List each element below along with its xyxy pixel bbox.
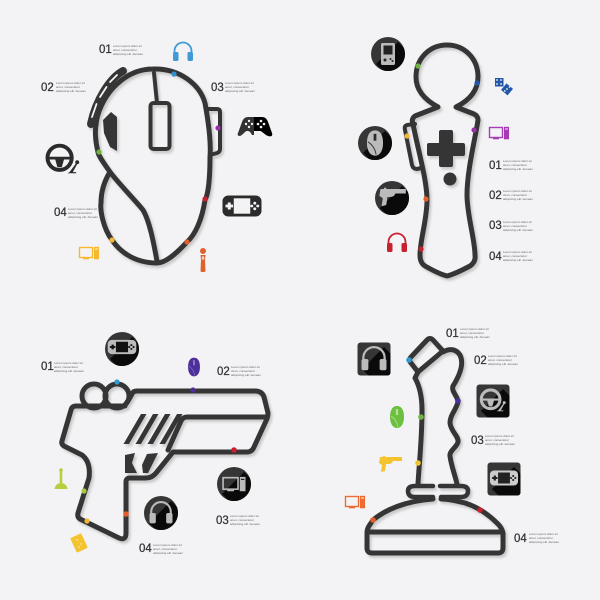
label 01	[446, 327, 490, 340]
colored dots	[96, 71, 221, 245]
icon: blue dice	[495, 78, 513, 95]
label 04: adipiscing elit. Aenean	[503, 258, 533, 262]
label 03: amet, consectetur	[503, 224, 527, 228]
label 04: adipiscing elit. Aenean	[153, 551, 183, 555]
label 03: adipiscing elit. Aenean	[230, 522, 260, 526]
label 02: 02	[217, 366, 230, 378]
label 03: 03	[216, 515, 229, 527]
label 02: adipiscing elit. Aenean	[488, 362, 518, 366]
label 02: amet, consectetur	[488, 358, 512, 362]
label 04: adipiscing elit. Aenean	[529, 540, 559, 544]
label 02: adipiscing elit. Aenean	[503, 197, 533, 201]
label 03: adipiscing elit. Aenean	[485, 442, 515, 446]
icon: game boy circle	[371, 37, 420, 86]
label 01: amet, consectetur	[113, 48, 137, 52]
icon: purple computer	[490, 127, 509, 139]
label 03: amet, consectetur	[230, 518, 254, 522]
icon: yellow dice	[70, 533, 88, 553]
icon: computer circle	[217, 467, 266, 516]
panel: light gun infographic	[41, 332, 268, 555]
joystick outline	[367, 338, 503, 553]
icon: wheel square	[476, 384, 525, 433]
gun outline	[62, 384, 268, 539]
label 04: amet, consectetur	[503, 254, 527, 258]
label 04	[489, 250, 533, 263]
label 03: 03	[211, 82, 224, 94]
label 01: 01	[489, 160, 502, 172]
label 01: adipiscing elit. Aenean	[113, 52, 143, 56]
icon: steering wheel	[48, 146, 79, 173]
label 04: 04	[54, 207, 67, 219]
label 04: 04	[514, 533, 527, 545]
panel: motion controller infographic	[358, 37, 533, 276]
label 01: 01	[99, 44, 112, 56]
label 02: amet, consectetur	[503, 193, 527, 197]
label 03: Lorem ipsum dolor sit	[503, 220, 532, 224]
icon: headphones circle	[144, 496, 193, 545]
label 02: Lorem ipsum dolor sit	[488, 354, 517, 358]
label 04	[54, 207, 98, 219]
label 01: Lorem ipsum dolor sit	[460, 327, 489, 331]
label 04: 04	[489, 251, 502, 263]
icon: orange motion controller	[200, 248, 206, 272]
label 04: amet, consectetur	[153, 547, 177, 551]
icon: console square	[488, 462, 536, 511]
label 04: amet, consectetur	[529, 536, 553, 540]
label 01: adipiscing elit. Aenean	[54, 369, 84, 373]
label 03	[216, 514, 260, 527]
label 02	[217, 365, 261, 378]
label 01	[489, 159, 533, 172]
label 03: 03	[489, 220, 502, 232]
label 03: amet, consectetur	[485, 438, 509, 442]
label 04: Lorem ipsum dolor sit	[529, 532, 558, 536]
label 03	[489, 220, 533, 232]
label 04: Lorem ipsum dolor sit	[68, 207, 97, 211]
label 01: Lorem ipsum dolor sit	[113, 44, 142, 48]
label 04: Lorem ipsum dolor sit	[503, 250, 532, 254]
label 03: amet, consectetur	[225, 85, 249, 89]
label 03	[471, 434, 515, 447]
label 02: 02	[41, 82, 54, 94]
icon: gamepad	[238, 117, 272, 136]
icon: console circle	[105, 332, 154, 381]
label 03: Lorem ipsum dolor sit	[230, 514, 259, 518]
icon: handheld console	[222, 196, 262, 216]
label 02: adipiscing elit. Aenean	[231, 373, 261, 377]
icon: green mouse	[390, 406, 404, 428]
label 02: Lorem ipsum dolor sit	[231, 365, 260, 369]
colored dots	[370, 357, 483, 523]
label 01: 01	[446, 328, 459, 340]
label 02: 02	[474, 355, 487, 367]
label 04: adipiscing elit. Aenean	[68, 215, 98, 219]
icon: yellow pistol	[379, 456, 402, 472]
panel: computer mouse infographic	[41, 42, 272, 272]
label 03: adipiscing elit. Aenean	[503, 228, 533, 232]
icon: lime joystick	[54, 468, 68, 489]
icon: pistol circle	[375, 181, 424, 230]
icon: purple mouse	[188, 358, 200, 376]
icon: mouse circle	[358, 126, 407, 175]
label 04: 04	[139, 543, 152, 555]
label 01: amet, consectetur	[503, 163, 527, 167]
label 03: adipiscing elit. Aenean	[225, 89, 255, 93]
label 02: adipiscing elit. Aenean	[56, 89, 86, 93]
icon: red headphones	[387, 234, 407, 252]
label 04	[139, 543, 183, 555]
label 02: amet, consectetur	[231, 369, 255, 373]
colored dots	[81, 379, 237, 524]
icon: orange computer	[346, 496, 365, 508]
label 02	[489, 189, 533, 202]
label 01: amet, consectetur	[54, 365, 78, 369]
mouse outline	[91, 69, 220, 263]
label 02: amet, consectetur	[56, 85, 80, 89]
label 01	[41, 361, 84, 373]
label 03: Lorem ipsum dolor sit	[225, 81, 254, 85]
icon: headphones square	[358, 342, 406, 391]
label 02: 02	[489, 190, 502, 202]
label 01	[99, 44, 143, 56]
label 01: amet, consectetur	[460, 331, 484, 335]
colored dots	[404, 63, 480, 252]
label 01: adipiscing elit. Aenean	[460, 335, 490, 339]
label 03: Lorem ipsum dolor sit	[485, 434, 514, 438]
label 03	[211, 81, 255, 94]
panel: joystick infographic	[346, 327, 559, 553]
label 01: Lorem ipsum dolor sit	[54, 361, 83, 365]
label 03: 03	[471, 435, 484, 447]
label 02: Lorem ipsum dolor sit	[56, 81, 85, 85]
icon: blue headphones	[173, 42, 193, 61]
label 02	[474, 354, 518, 367]
label 04: Lorem ipsum dolor sit	[153, 543, 182, 547]
label 04	[514, 532, 559, 545]
label 04: amet, consectetur	[68, 211, 92, 215]
label 02	[41, 81, 86, 94]
label 01: Lorem ipsum dolor sit	[503, 159, 532, 163]
controller outline	[405, 45, 478, 276]
label 02: Lorem ipsum dolor sit	[503, 189, 532, 193]
label 01: adipiscing elit. Aenean	[503, 167, 533, 171]
label 01: 01	[41, 361, 54, 373]
icon: yellow computer	[80, 247, 99, 259]
